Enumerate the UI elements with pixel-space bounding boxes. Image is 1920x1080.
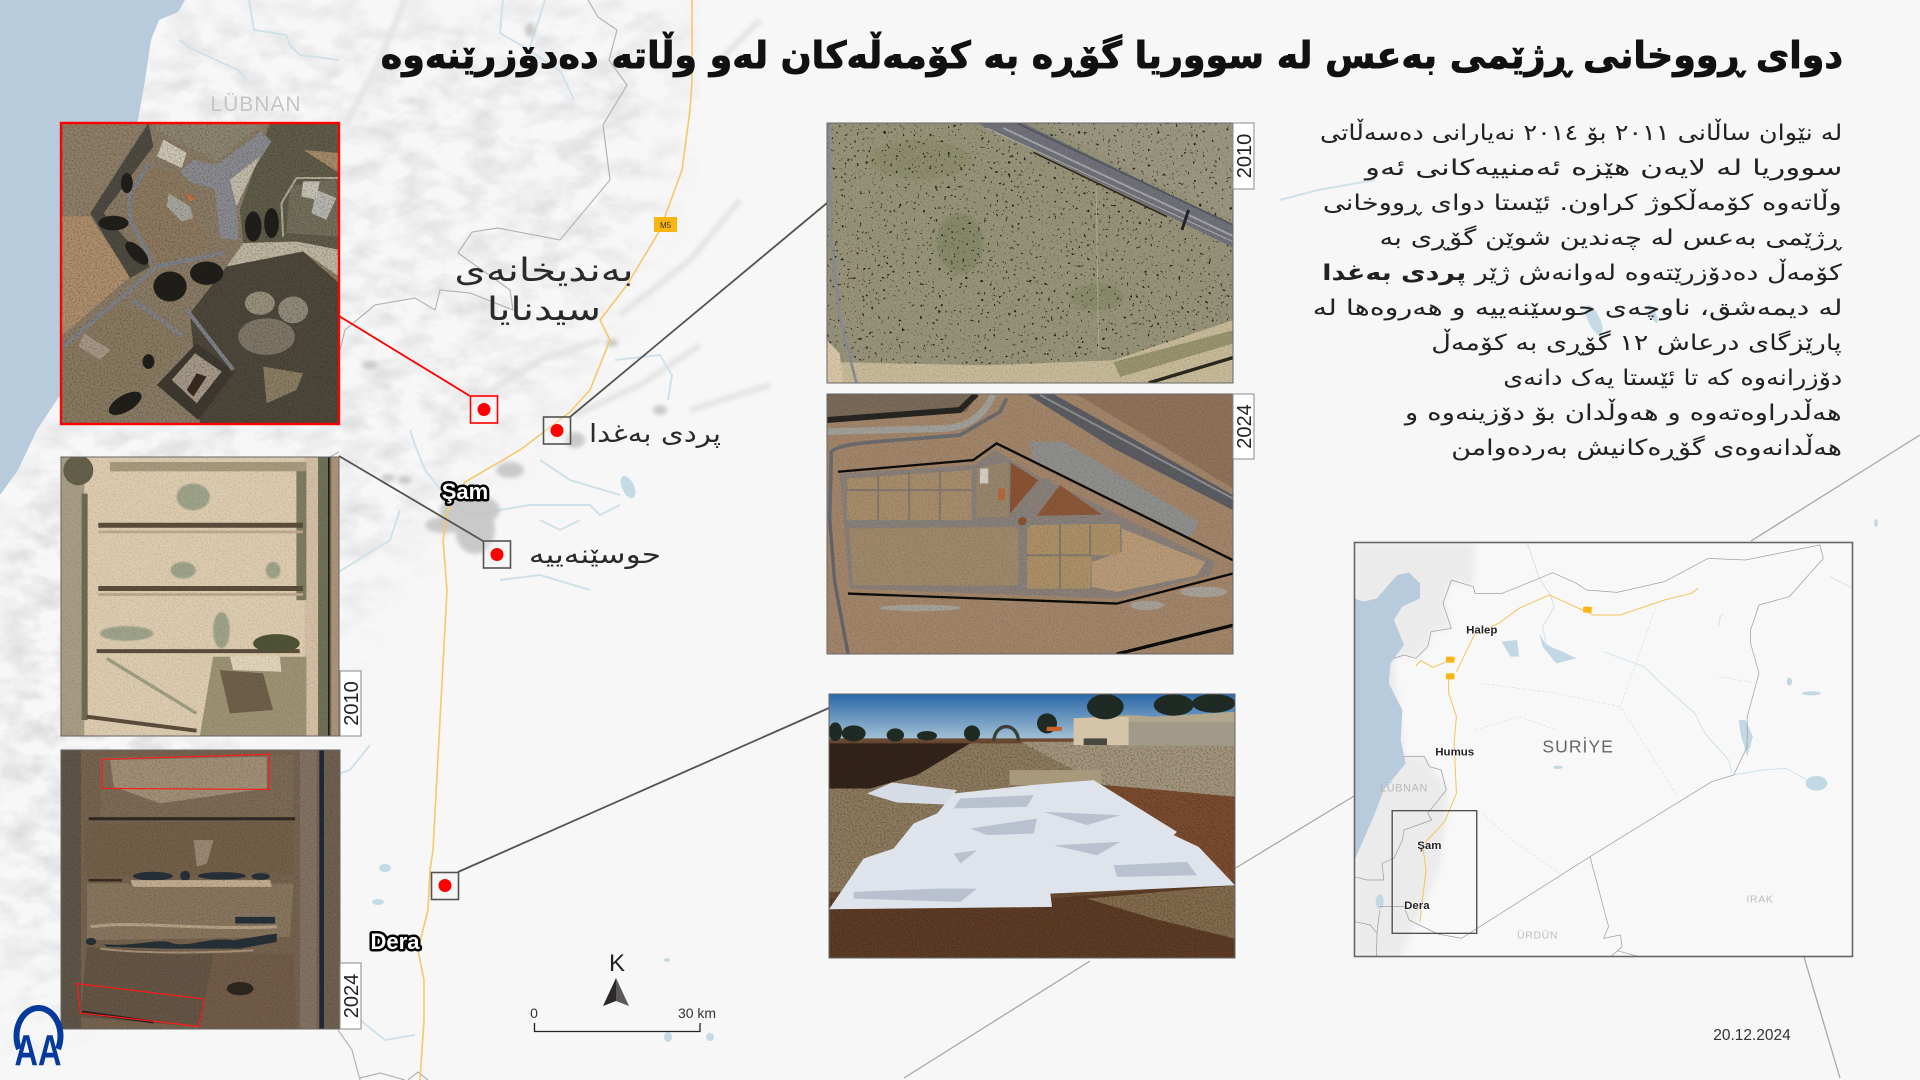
inset map: Syria locator: IRAK bbox=[1746, 895, 1774, 906]
intro paragraph: ڕژێمی بەعس لە چەندین شوێن گۆڕی بە bbox=[1380, 226, 1842, 251]
panel: Husseiniya 2010 satellite image bbox=[61, 455, 339, 736]
panel: Husseiniya 2024 satellite image bbox=[61, 750, 340, 1029]
connector: prison bbox=[339, 316, 470, 396]
inset map: Syria locator: SURİYE bbox=[1542, 737, 1614, 757]
year label: 2010: 2010 bbox=[341, 681, 363, 726]
inset map: Syria locator bbox=[1354, 542, 1853, 957]
intro paragraph: سووریا لە لایەن هێزە ئەمنییەکانی ئەو bbox=[1364, 156, 1842, 181]
panel: Baghdad bridge 2024 satellite image bbox=[827, 394, 1233, 654]
inset map: Syria locator: Dera bbox=[1404, 900, 1430, 912]
city label: Sham: Şam bbox=[442, 479, 488, 504]
north arrow: K bbox=[609, 950, 625, 977]
connector: Husseiniya bbox=[339, 456, 483, 541]
urban area: Damascus bbox=[362, 23, 667, 554]
intro paragraph: دۆزرانەوە کە تا ئێستا یەک دانەی bbox=[1503, 366, 1842, 391]
map label: Lübnan: LÜBNAN bbox=[210, 93, 302, 116]
intro paragraph: هەڵدانەوەی گۆڕەکانیش بەردەوامن bbox=[1451, 436, 1842, 461]
connector: Daraa bbox=[458, 708, 829, 872]
borders bbox=[240, 0, 627, 1080]
road bbox=[418, 0, 692, 1080]
lakes bbox=[372, 303, 1878, 1042]
connector: Baghdad bridge bbox=[570, 203, 827, 417]
inset map: Syria locator: Şam bbox=[1417, 840, 1442, 852]
map label: Baghdad bridge: پردی بەغدا bbox=[589, 419, 721, 448]
intro paragraph: پارێزگای درعاش ١٢ گۆڕی بە کۆمەڵ bbox=[1432, 331, 1842, 356]
scale bar: 30 km bbox=[678, 1005, 716, 1021]
intro paragraph: لە دیمەشق، ناوچەی حوسێنەییە و هەروەها لە bbox=[1312, 296, 1842, 321]
intro paragraph: کۆمەڵ دەدۆزرێتەوە لەوانەش ژێر پردی بەغدا bbox=[1322, 261, 1842, 286]
year label: 2010: 2010 bbox=[1234, 134, 1256, 178]
intro paragraph: لە نێوان ساڵانی ٢٠١١ بۆ ٢٠١٤ نەیارانی دەسەڵاتی bbox=[1320, 121, 1842, 146]
intro paragraph: هەڵدراوەتەوە و هەوڵدان بۆ دۆزینەوە و bbox=[1405, 401, 1842, 426]
map label: Sednaya prison: بەندیخانەی bbox=[454, 251, 634, 289]
intro paragraph bbox=[1312, 118, 1842, 461]
panel: Sednaya prison satellite image bbox=[61, 123, 339, 424]
north arrow bbox=[603, 950, 629, 1006]
map label: Sednaya prison bbox=[454, 251, 634, 328]
marker: Husseiniya bbox=[484, 541, 510, 568]
map label: Sednaya prison: سیدنایا bbox=[487, 290, 601, 328]
year label: 2024: 2024 bbox=[341, 974, 363, 1018]
panel: Baghdad bridge 2010 satellite image bbox=[827, 123, 1233, 383]
marker: prison bbox=[470, 396, 498, 423]
scale bar: 0 bbox=[530, 1005, 538, 1021]
intro paragraph: وڵاتەوە کۆمەڵکوژ کراون. ئێستا دوای ڕووخانی bbox=[1323, 191, 1842, 216]
road shield M5 bbox=[654, 217, 677, 232]
year label: 2024: 2024 bbox=[1234, 404, 1256, 449]
year label: 2024 bbox=[340, 963, 363, 1029]
map label: Husseiniya: حوسێنەییە bbox=[529, 540, 661, 569]
logo: AA bbox=[14, 1008, 62, 1075]
terrain shading bbox=[0, 0, 700, 1080]
title: دوای ڕووخانی ڕژێمی بەعس لە سووریا گۆڕە بە کۆمەڵەکان لەو وڵاتە دەدۆزرێنەوە bbox=[381, 34, 1843, 77]
date: 20.12.2024 bbox=[1713, 1027, 1791, 1044]
panel: photo of body bags in Daraa bbox=[829, 694, 1235, 959]
sea bbox=[0, 0, 185, 495]
marker: Daraa bbox=[432, 872, 458, 900]
year label: 2010 bbox=[340, 671, 363, 736]
inset map: Syria locator: LÜBNAN bbox=[1380, 783, 1428, 795]
scale bar bbox=[530, 1005, 716, 1032]
country border lines bbox=[904, 435, 1920, 1078]
inset map: Syria locator: ÜRDÜN bbox=[1517, 930, 1558, 942]
road shield M5: M5 bbox=[660, 221, 672, 230]
marker: Baghdad bridge bbox=[544, 417, 570, 444]
city label: Dera: Dera bbox=[371, 929, 420, 954]
logo: AA: AA bbox=[14, 1026, 62, 1075]
mountain ridges bbox=[345, 0, 770, 415]
rivers bbox=[180, 0, 1375, 1040]
inset map: Syria locator: Humus bbox=[1435, 747, 1474, 759]
inset map: Syria locator: Halep bbox=[1466, 624, 1497, 636]
year label: 2010 bbox=[1233, 123, 1256, 189]
year label: 2024 bbox=[1233, 394, 1256, 459]
